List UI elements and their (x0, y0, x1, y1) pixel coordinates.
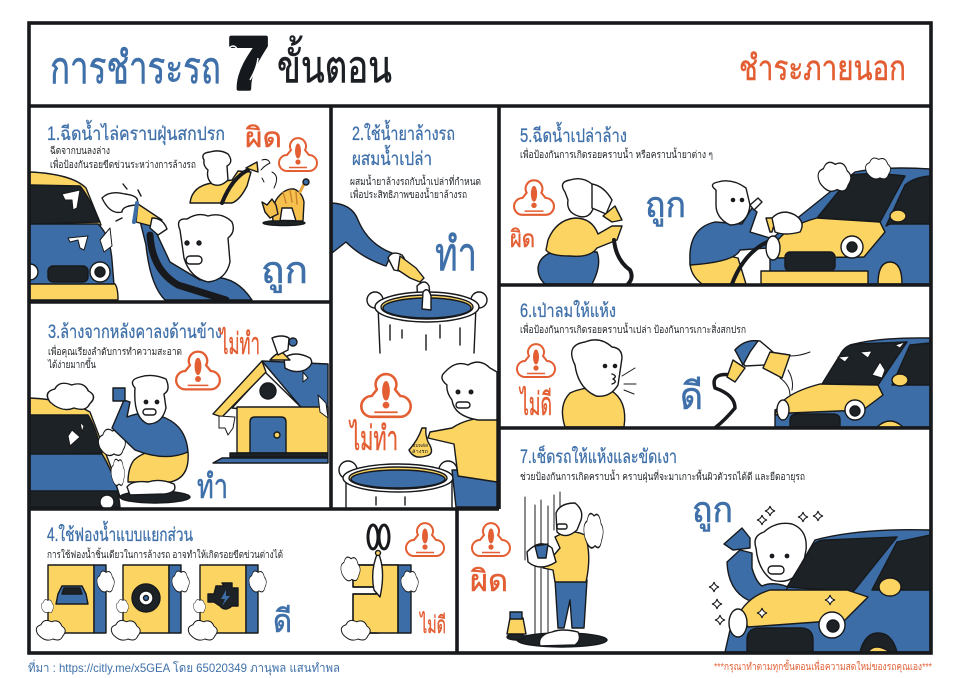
text: step 2 description: เพื่อประสิทธิภาพของน้ำยาล้างรถ (350, 187, 467, 201)
panel: step 1 rinse (30, 120, 317, 300)
text: step 5 description: เพื่อป้องกันการเกิดรอยคราบน้ำ หรือคราบน้ำยาต่าง ๆ (520, 147, 713, 161)
illustration: angry person spraying (190, 151, 277, 203)
label: do: ทำ (435, 228, 477, 280)
heading: step 2: ผสมน้ำเปล่า (352, 145, 432, 170)
text: step 3 description: เพื่อคุณเรียงลำดับการทำความสะอาด (48, 344, 182, 358)
illustration: sponge cut with scissors (341, 525, 418, 640)
label: wrong: ผิด (470, 565, 508, 598)
label: good: ดี (273, 603, 292, 639)
label: do not: ไม่ทำ (348, 419, 398, 458)
heading: step 5: 5.ฉีดน้ำเปล่าล้าง (520, 122, 627, 147)
icon: sponge for car body (36, 565, 114, 640)
title: car wash: การชำระรถ (50, 44, 221, 93)
title: steps: ขั้นตอน (277, 35, 392, 92)
heading: step 4: 4.ใช้ฟองน้ำแบบแยกส่วน (47, 521, 193, 546)
label: wrong: ผิด (245, 122, 282, 153)
icon: warning (176, 352, 220, 389)
text: step 1 description (50, 145, 196, 171)
illustration: person with soap bag: ล้างรถ (412, 449, 428, 454)
panel: title header (50, 22, 906, 105)
icon: warning (517, 344, 555, 377)
panel: step 4 separate sponges (36, 521, 446, 640)
text: step 3 description: ได้ง่ายมากขึ้น (47, 357, 96, 371)
illustration: happy person with hose (134, 203, 252, 300)
illustration: scared cat (262, 179, 309, 226)
illustration: shiny car (725, 530, 930, 652)
icon: warning (406, 523, 444, 556)
illustration: lower bucket of water (339, 461, 457, 507)
text: step 7 description: ช่วยป้องกันการเกิดคราบน้ำ คราบฝุ่นที่จะมาเกาะพื้นผิวตัวรถได้ดี และยืดอายุรถ (520, 469, 805, 483)
label: wrong: ผิด (510, 226, 535, 253)
illustration: air dryer (714, 341, 810, 427)
text: step 6 description: เพื่อป้องกันการเกิดรอยคราบน้ำเปล่า ป้องกันการเกาะสิ่งสกปรก (520, 322, 746, 336)
label: not good: ไม่ดี (518, 386, 552, 422)
illustration: house being washed (213, 336, 328, 463)
label: not good: ไม่ดี (419, 611, 446, 639)
heading: step 3: 3.ล้างจากหลังคาลงด้านข้าง (48, 322, 222, 343)
subtitle: exterior: ชำระภายนอก (739, 49, 906, 88)
heading: step 7: 7.เช็ดรถให้แห้งและขัดเงา (520, 444, 677, 468)
text: step 3 description (47, 344, 182, 371)
illustration: person with soap bag (409, 362, 497, 507)
text: step 4 description: การใช้ฟองน้ำชิ้นเดียวในการล้างรถ อาจทำให้เกิดรอยขีดข่วนต่างได้ (47, 547, 283, 561)
panel: step 6 air dry (517, 300, 930, 427)
illustration: upper bucket of water (367, 290, 487, 353)
illustration: car with foam on windshield (761, 158, 930, 284)
illustration: person with soap bag: ชมพลัส (412, 443, 428, 448)
text: step 2 description (350, 174, 481, 201)
icon: sparkles (709, 506, 835, 625)
illustration: car being dried (775, 338, 930, 427)
heading: step 2 (352, 120, 455, 170)
illustration: blue and yellow car front (30, 172, 118, 300)
illustration: car with foam (30, 383, 125, 509)
label: correct: ถูก (261, 250, 308, 293)
panel: step 2 mix soap (332, 120, 497, 507)
label: good: ดี (680, 376, 703, 418)
label: do: ทำ (197, 468, 228, 506)
label: correct: ถูก (645, 184, 686, 227)
icon: warning (361, 374, 411, 417)
icon: warning (514, 180, 554, 215)
panel: step 3 roof down (30, 322, 328, 509)
icon: sponge for wheels (111, 565, 189, 640)
illustration: person rinsing car (690, 181, 776, 284)
illustration: person washing from roof (112, 375, 190, 503)
heading: step 1: 1.ฉีดน้ำไล่คราบฝุ่นสกปรก (47, 120, 225, 146)
label: correct: ถูก (692, 489, 733, 532)
illustration: person polishing with cloth (724, 523, 810, 606)
illustration: person scrubbing wrongly (507, 492, 607, 647)
icon: warning (472, 523, 510, 556)
panel: step 7 towel dry and polish (470, 444, 930, 652)
illustration: person spraying self (538, 179, 632, 284)
icon: warning (279, 138, 317, 171)
text: step 1 description: เพื่อป้องกันรอยขีดข่วนระหว่างการล้างรถ (50, 157, 196, 171)
text: step 1 description: ฉีดจากบนลงล่าง (50, 145, 110, 157)
heading: step 2: 2.ใช้น้ำยาล้างรถ (352, 120, 455, 145)
illustration: arm pouring soap (332, 203, 431, 308)
panel: step 5 plain water rinse (510, 122, 930, 284)
icon: sponge for engine (188, 565, 266, 640)
label: do not: ไม่ทำ (219, 326, 260, 361)
heading: step 6: 6.เป่าลมให้แห้ง (520, 300, 616, 322)
illustration: water spray (102, 184, 141, 221)
icon: big number 7: 7 (228, 22, 269, 105)
text: step 2 description: ผสมน้ำยาล้างรถกับน้ำเปล่าที่กำหนด (350, 174, 481, 188)
illustration: person blowing (562, 340, 636, 427)
text: source credit: ที่มา : https://citly.me/x5GEA โดย 65020349 ภานุพล แสนทำพล (28, 659, 340, 676)
